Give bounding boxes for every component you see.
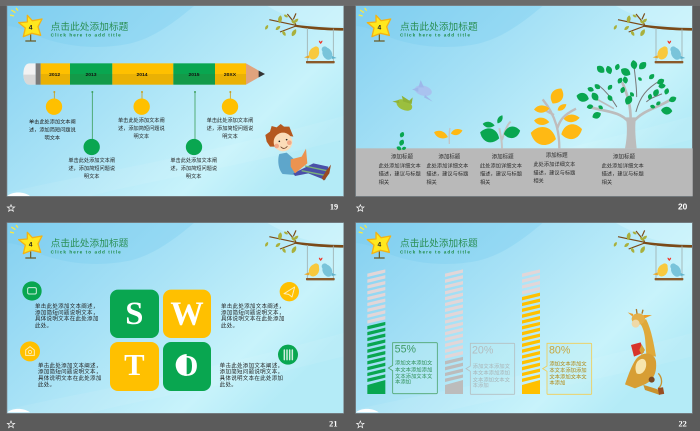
tile S: S [125,296,143,332]
page number: 22 [678,419,687,428]
caption 2: 此处添加详细文本 [426,161,468,169]
text block top left: 单击此处添加文本阐述， [35,302,99,310]
tile O [163,342,211,391]
text block bottom right: 具体说明文本在此处添加 [220,374,283,382]
pencil timeline bar: 2012 [49,72,60,78]
caption 4 [533,151,575,185]
panel: slide 19 pencil timeline: 4 [29,25,33,32]
plant stage 4 [529,86,584,148]
callout 80%: 文本添加文本文 [549,373,587,381]
icon: yellow paper plane [280,282,299,301]
subheading: Click here to add title [400,33,470,38]
page star icon [7,421,15,428]
callout 55%: 本添加 [395,378,411,386]
timeline marker 2014: 述，添加简短问题说 [118,124,165,132]
heading: 点击此处添加标题 [51,238,129,250]
heading: 点击此处添加标题 [51,21,129,33]
plant stage 2 [433,128,463,144]
text block top left [35,302,99,329]
caption 2: 相关 [426,178,437,186]
text block top left: 具体说明文本在此处添加 [35,315,99,323]
timeline marker 2012 [29,91,76,142]
caption 3: 添加标题 [492,152,514,160]
text block top left: 添加简短问题说明文本， [35,308,99,316]
timeline marker 2014: 明文本 [134,132,149,140]
caption 3: 描述，建议与标题 [480,170,522,178]
caption 5: 相关 [602,178,612,186]
timeline marker 2013 [68,91,115,180]
plant stage 1 [396,131,407,151]
caption 4: 此处添加详细文本 [533,160,575,168]
timeline marker 2013: 单击此处添加文本阐 [68,156,115,164]
subheading: Click here to add title [51,249,121,254]
caption 4: 添加标题 [546,151,568,159]
ground band [356,148,693,196]
callout 80%: 添加文本添加文 [549,359,587,367]
callout 20%: 本添加 [473,381,489,389]
caption 5: 添加标题 [613,152,635,160]
caption 5: 此处添加详细文本 [602,161,644,169]
text block bottom left: 此处。 [38,380,55,388]
caption 4: 描述，建议与标题 [533,168,575,176]
icon: green bird [392,96,414,113]
tile T: T [124,348,145,382]
panel: slide 21 SWOT: 4 [29,241,33,248]
text block top right: 添加简短问题说明文本， [221,308,285,316]
pencil timeline bar: 2014 [136,72,148,78]
timeline marker 2013: 明文本 [84,172,99,180]
caption 2: 添加标题 [438,152,461,160]
callout 20%: 本文本添加添加 [473,369,510,377]
panel: slide 19 pencil timeline [7,5,344,212]
timeline marker 20XX: 单击此处添加文本阐 [207,116,253,124]
tile W: W [170,296,204,333]
timeline marker 2015 [170,91,217,180]
text block bottom left: 单击此处添加文本阐述， [38,361,102,369]
callout 20%: 文本添加文本文 [473,375,511,383]
page number: 21 [329,419,337,428]
caption 1: 相关 [379,178,389,186]
plant stage 5: full tree [575,60,677,148]
timeline marker 20XX: 明文本 [222,132,238,140]
callout 80%: 本添加 [549,378,565,386]
caption 1 [379,152,421,186]
timeline marker 2014 [118,91,165,140]
text block top right: 单击此处添加文本阐述， [221,302,285,310]
striped bar 20% [445,269,463,394]
callout 80%: 80% [549,344,571,356]
tile T [110,342,159,391]
page number: 19 [330,203,338,212]
text block top left: 此处。 [35,321,52,329]
timeline marker 20XX: 述，添加简短问题说 [207,124,253,132]
caption 3: 此处添加详细文本 [480,161,522,169]
icon: green sliders [278,345,298,365]
callout 20%: 添加文本添加文 [473,362,511,370]
text block bottom right: 单击此处添加文本阐述， [220,361,283,369]
panel: slide 20 tree growth: 4 [377,25,381,32]
plant stage 3 [478,114,521,148]
text block top right: 此处。 [221,321,238,329]
tile W [163,290,211,338]
striped bar 80% [522,269,540,394]
icon: green monitor [22,281,42,301]
page number: 20 [678,201,688,211]
timeline marker 2015: 述，添加简短问题说 [170,164,217,172]
pencil timeline bar: 2015 [188,72,200,78]
callout 55%: 55% [395,344,417,356]
pencil timeline bar [23,63,265,85]
caption 1: 此处添加详细文本 [379,161,421,169]
caption 1: 描述，建议与标题 [379,170,421,178]
caption 3: 相关 [480,178,490,186]
callout 55% [388,343,437,394]
callout 80%: 本文本添加添加 [549,366,587,374]
timeline marker 2012: 单击此处添加文本阐 [29,118,76,126]
timeline marker 2015: 单击此处添加文本阐 [170,156,217,164]
icon: boy reading [265,124,331,181]
subheading: Click here to add title [51,33,121,38]
page star icon [357,421,364,428]
panel: slide 22 progress bars [355,222,693,428]
callout 20%: 20% [472,344,494,356]
pencil timeline bar: 20XX [224,72,237,78]
callout 20% [466,343,515,394]
timeline marker 20XX [207,91,253,140]
tile S [110,290,159,338]
caption 1: 添加标题 [391,152,413,160]
callout 80% [543,343,592,394]
timeline marker 2012: 述，添加简短问题说 [29,126,76,134]
caption 2: 描述，建议与标题 [426,170,468,178]
pencil timeline bar: 2013 [85,72,97,78]
callout 55%: 本文本添加添加 [395,365,432,373]
tile O: O [175,349,198,382]
caption 5: 描述，建议与标题 [602,170,644,178]
text block top right: 具体说明文本在此处添加 [221,315,285,323]
icon: yellow house [20,341,40,361]
timeline marker 2014: 单击此处添加文本阐 [118,116,165,124]
text block top right [221,302,285,329]
striped bar 55% [367,269,385,394]
caption 2 [426,152,468,186]
subheading: Click here to add title [400,249,470,254]
panel: slide 21 SWOT [7,222,344,428]
text block bottom right: 此处。 [220,380,237,388]
panel: slide 20 tree growth [355,5,693,211]
caption 3 [480,152,522,186]
text block bottom left [38,361,102,388]
callout 55%: 添加文本添加文 [395,359,433,367]
text block bottom left: 具体说明文本在此处添加 [38,374,102,382]
text block bottom right [220,361,283,388]
page star icon [7,205,15,211]
caption 4: 相关 [533,177,544,185]
panel: slide 22 progress bars: 4 [377,241,381,248]
timeline marker 2015: 明文本 [186,172,201,180]
callout 55%: 文本添加文本文 [395,372,433,380]
timeline marker 2012: 明文本 [45,134,60,142]
page star icon [357,205,364,211]
heading: 点击此处添加标题 [400,21,478,33]
timeline marker 2013: 述，添加简短问题说 [68,164,115,172]
icon: giraffe reading [625,309,664,395]
text block bottom right: 添加简短问题说明文本， [220,368,283,376]
text block bottom left: 添加简短问题说明文本， [38,368,102,376]
caption 5 [602,152,644,186]
heading: 点击此处添加标题 [400,238,478,250]
icon: blue bird [412,80,433,102]
